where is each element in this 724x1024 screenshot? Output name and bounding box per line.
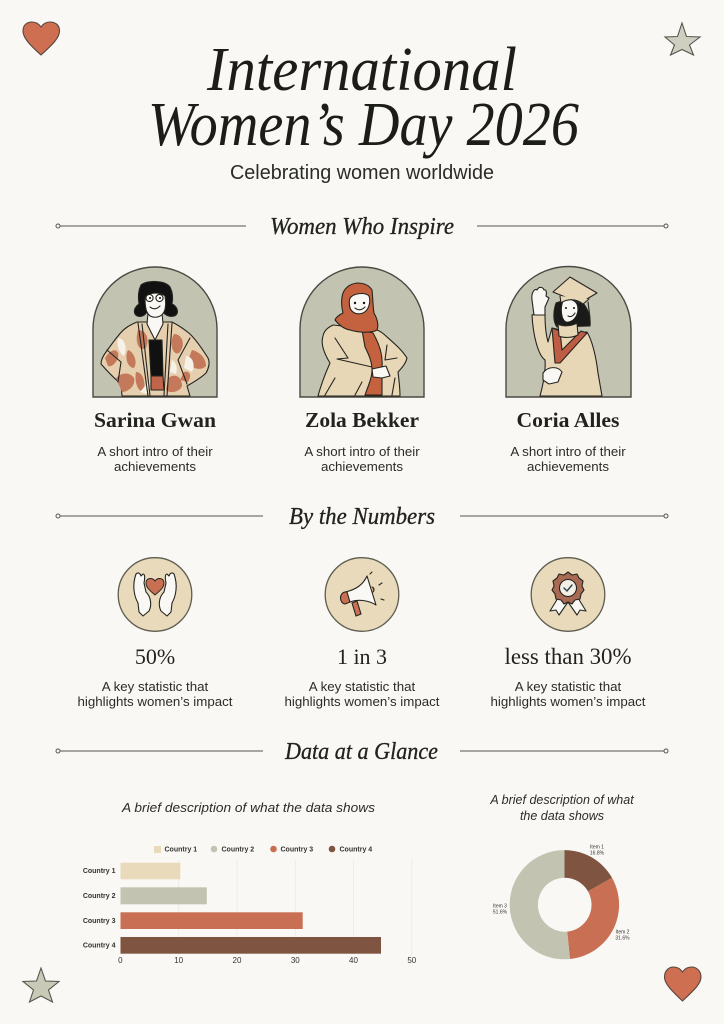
title: International [206, 36, 517, 104]
donut chart description [489, 793, 634, 823]
bars [120, 863, 381, 954]
donut labels: Item 3 [493, 904, 507, 910]
legend: Country 3 [280, 846, 313, 854]
axis labels: 20 [233, 956, 242, 965]
category labels: Country 1 [83, 868, 116, 875]
bar chart description: A brief description of what the data shows [121, 801, 375, 815]
donut labels: Item 2 [616, 930, 630, 936]
intro text: A short intro of their [510, 444, 626, 459]
category labels: Country 4 [83, 942, 116, 950]
description [285, 679, 440, 709]
donut labels: 51.6% [493, 910, 508, 916]
value: less than 30% [504, 644, 632, 669]
portrait: Sarina Gwan [93, 267, 217, 397]
donut labels: 31.6% [615, 936, 630, 942]
legend: Country 1 [164, 846, 197, 854]
legend: Country 2 [222, 846, 254, 854]
section heading: Women Who Inspire [56, 214, 668, 240]
category labels [83, 868, 116, 950]
intro text: A short intro of their [304, 444, 420, 459]
donut labels: Item 1 [590, 844, 604, 850]
description [78, 679, 233, 709]
icon: star bottom left [23, 968, 59, 1002]
portrait: Coria Alles [506, 267, 631, 397]
legend [154, 846, 372, 854]
donut labels [493, 844, 630, 942]
section heading: By the Numbers: By the Numbers [289, 504, 435, 530]
category labels: Country 2 [83, 893, 116, 900]
bar chart [83, 846, 417, 965]
stat: 1 in 3 [285, 558, 440, 709]
section heading: Data at a Glance: Data at a Glance [284, 739, 438, 765]
name: Zola Bekker [305, 408, 419, 432]
description: highlights women’s impact [491, 694, 646, 709]
name: Sarina Gwan [94, 408, 216, 432]
donut chart description: the data shows [520, 809, 604, 823]
icon: heart bottom right [664, 967, 701, 1001]
axis labels: 0 [118, 956, 123, 965]
category labels: Country 3 [83, 918, 116, 925]
icon: award ribbon [531, 558, 605, 631]
legend: Country 4 [340, 846, 372, 854]
intro text [97, 444, 213, 474]
portrait: Zola Bekker [300, 267, 424, 397]
intro text: achievements [527, 459, 609, 474]
name: Coria Alles [516, 408, 620, 432]
description: A key statistic that [309, 679, 416, 694]
donut labels: 16.8% [590, 850, 605, 856]
intro text: A short intro of their [97, 444, 213, 459]
description [491, 679, 646, 709]
subtitle: Celebrating women worldwide [230, 162, 494, 184]
value: 1 in 3 [337, 644, 387, 669]
section heading: Women Who Inspire: Women Who Inspire [270, 214, 454, 240]
value: 50% [135, 644, 175, 669]
axis labels: 50 [407, 956, 417, 965]
stat: less than 30% [491, 558, 646, 709]
section heading: Data at a Glance [56, 739, 668, 765]
description: highlights women’s impact [78, 694, 233, 709]
panel: Sarina Gwan [93, 267, 217, 474]
description: A key statistic that [102, 679, 209, 694]
icon: star top right [665, 23, 700, 55]
donut chart description: A brief description of what [489, 793, 634, 807]
icon: hands holding heart [118, 558, 192, 631]
title [148, 36, 579, 159]
description: A key statistic that [515, 679, 622, 694]
icon: heart top left [23, 22, 60, 55]
intro text: achievements [321, 459, 403, 474]
stat: 50% [78, 558, 233, 709]
axis labels: 40 [349, 956, 358, 965]
axis labels [118, 956, 417, 965]
axis labels: 10 [174, 956, 184, 965]
panel: Zola Bekker [300, 267, 424, 474]
intro text [304, 444, 420, 474]
axis labels: 30 [291, 956, 300, 965]
intro text [510, 444, 626, 474]
icon: megaphone [325, 558, 399, 631]
description: highlights women’s impact [285, 694, 440, 709]
section heading: By the Numbers [56, 504, 668, 530]
title: Women’s Day 2026 [148, 91, 579, 159]
panel: Coria Alles [506, 267, 631, 474]
intro text: achievements [114, 459, 196, 474]
donut chart [493, 844, 630, 959]
